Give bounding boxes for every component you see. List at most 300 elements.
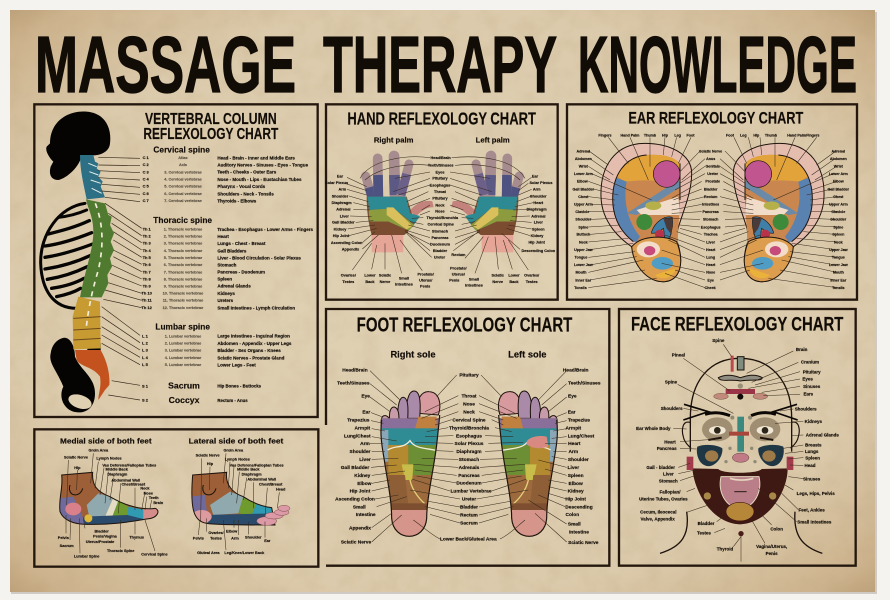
section: thoracic spine: Adrenal Glands bbox=[217, 284, 251, 289]
labels: Head/Brain bbox=[431, 156, 451, 160]
labels: Solar Plexus bbox=[530, 181, 552, 185]
labels: Bladder bbox=[704, 187, 718, 191]
labels: Chest bbox=[833, 195, 844, 199]
labels: Heart bbox=[706, 263, 716, 267]
section: lumbar spine: Lower Legs - Feet bbox=[217, 362, 256, 367]
labels: Kidneys bbox=[805, 419, 823, 424]
labels: Abdominal Wall bbox=[111, 478, 140, 482]
section: cervical spine: 3. Cervical vertebrae bbox=[164, 170, 202, 174]
illustration: right sole bbox=[378, 391, 442, 545]
labels: Sciatic Nerve bbox=[64, 456, 88, 460]
labels: Prostate/ bbox=[450, 267, 467, 271]
section: thoracic spine: Ureters bbox=[217, 298, 234, 303]
labels: Ascending Colon bbox=[331, 241, 363, 245]
labels: Spleen bbox=[832, 233, 844, 237]
labels: Chest/Breast bbox=[122, 483, 146, 487]
labels: Shoulder bbox=[332, 194, 349, 198]
section: thoracic spine: Th 2 bbox=[143, 234, 152, 239]
labels: Penis bbox=[766, 551, 778, 556]
labels: Throat bbox=[461, 393, 477, 399]
section: sacrum and coccyx: S 2 bbox=[142, 397, 149, 402]
labels: Pituitary bbox=[432, 177, 449, 181]
title: THERAPY bbox=[323, 20, 557, 109]
section: thoracic spine: 4. Thoracic vertebrae bbox=[164, 249, 202, 253]
labels: Spine bbox=[578, 225, 588, 229]
labels: Descending bbox=[565, 504, 593, 510]
labels: Rectum bbox=[460, 513, 478, 519]
labels: Lower Jaw bbox=[574, 263, 593, 267]
section: thoracic spine: Spleen bbox=[217, 277, 232, 282]
labels: Abdomen bbox=[830, 157, 847, 161]
labels: Hip Joint bbox=[528, 241, 546, 245]
labels: Legs, Hips, Pelvis bbox=[797, 491, 835, 496]
labels: Intestines bbox=[465, 283, 483, 287]
labels: Penis/Vagina bbox=[93, 534, 118, 538]
illustration: left palm bbox=[451, 156, 519, 252]
labels: Heart bbox=[664, 439, 676, 444]
section: cervical spine: Teeth - Cheeks - Outer Ears bbox=[217, 170, 277, 175]
labels: Throat bbox=[434, 190, 447, 194]
labels: Gall Bladder bbox=[573, 187, 595, 191]
section: cervical spine: 4. Cervical vertebrae bbox=[164, 177, 202, 181]
labels: Trapezius bbox=[568, 417, 590, 423]
labels: Pituitary bbox=[459, 373, 479, 379]
labels: Shoulder bbox=[830, 218, 847, 222]
labels: Liver bbox=[340, 214, 349, 218]
labels: Spine bbox=[665, 379, 678, 384]
labels: Appendix bbox=[342, 247, 360, 251]
labels: Esophagus bbox=[456, 433, 482, 439]
labels: Kidney bbox=[531, 234, 544, 238]
labels: Ureter bbox=[707, 172, 719, 176]
labels: Teeth/Sinuses bbox=[568, 380, 601, 386]
labels: Thoracic Spine bbox=[107, 549, 134, 553]
labels: Armpit bbox=[566, 425, 581, 431]
section: cervical spine: Pharynx - Vocal Cords bbox=[217, 184, 266, 189]
labels: Bladder bbox=[433, 249, 448, 253]
section: thoracic spine: Heart bbox=[217, 234, 229, 239]
labels: Colon bbox=[565, 512, 579, 518]
labels: Duodenum bbox=[456, 481, 482, 487]
illustration: right ear bbox=[733, 143, 824, 282]
labels: Sciatic Nerve bbox=[196, 454, 220, 458]
labels: Sinuses bbox=[803, 384, 821, 389]
section: lumbar spine bbox=[142, 322, 292, 367]
labels: Uterus/ bbox=[419, 278, 433, 282]
section: thoracic spine: Gall Bladders bbox=[217, 248, 247, 253]
labels: Ear bbox=[532, 174, 539, 178]
labels: Pancreas bbox=[431, 236, 449, 240]
section: cervical spine: Auditory Nerves - Sinuses - Eyes - Tongue bbox=[217, 163, 309, 168]
illustration: right palm bbox=[366, 156, 434, 252]
labels: Tonsils bbox=[574, 286, 587, 290]
subheading: medial side: Medial side of both feet bbox=[60, 437, 152, 446]
heading: vertebral column: REFLEXOLOGY CHART bbox=[143, 126, 279, 143]
labels: Upper Jaw bbox=[829, 248, 848, 252]
labels: Cheek bbox=[705, 286, 717, 290]
labels: Sacrum bbox=[460, 521, 478, 527]
heading: foot chart: FOOT REFLEXOLOGY CHART bbox=[357, 314, 573, 337]
section: thoracic spine: Th 11 bbox=[142, 298, 153, 303]
labels: Uterus/Prostate bbox=[86, 540, 114, 544]
labels: Gall - bladder bbox=[646, 465, 675, 470]
labels: Groin Area bbox=[89, 448, 109, 452]
labels: Prostate/ bbox=[417, 272, 435, 276]
panel: hand reflexology chart bbox=[325, 104, 558, 300]
section: thoracic spine: 8. Thoracic vertebrae bbox=[164, 277, 202, 281]
labels: Groin Area bbox=[224, 448, 244, 452]
section: thoracic spine: Th 10 bbox=[141, 291, 153, 296]
labels: Neck bbox=[463, 409, 475, 415]
labels: Lower Arm bbox=[829, 172, 849, 176]
labels: Testes bbox=[342, 280, 354, 284]
labels: Abdomen bbox=[575, 157, 592, 161]
section: lumbar spine: L 5 bbox=[142, 362, 149, 367]
labels: Prostate bbox=[705, 180, 720, 184]
labels: Leg/Knee/Lower Back bbox=[224, 551, 265, 555]
labels: Heart bbox=[568, 441, 581, 447]
labels: Clavicle bbox=[831, 210, 845, 214]
labels: Spine bbox=[833, 225, 843, 229]
section: sacrum and coccyx: Rectum - Anus bbox=[217, 398, 248, 403]
labels: Shoulder bbox=[575, 218, 592, 222]
labels: Uterine Tubes, Ovaries bbox=[639, 497, 688, 502]
labels: Hand Palm bbox=[621, 134, 640, 138]
labels: Duodenum bbox=[430, 243, 451, 247]
section: lumbar spine: 1. Lumbar vertebrae bbox=[165, 334, 201, 338]
section: thoracic spine: 6. Thoracic vertebrae bbox=[164, 263, 202, 267]
section: lumbar spine: 2. Lumbar vertebrae bbox=[165, 342, 201, 346]
labels: Neck bbox=[140, 487, 150, 491]
section: thoracic spine: Th 4 bbox=[143, 248, 152, 253]
labels: Small Intestines bbox=[797, 520, 832, 525]
labels: Diaphragm bbox=[527, 208, 547, 212]
labels: Intestines bbox=[395, 282, 413, 286]
labels: Chest/Breast bbox=[259, 483, 283, 487]
labels: Nose bbox=[435, 209, 445, 213]
section: lumbar spine: L 2 bbox=[142, 341, 149, 346]
illustration: left sole bbox=[497, 391, 560, 545]
labels: Shoulders bbox=[795, 407, 817, 412]
subheading: left palm: Left palm bbox=[476, 135, 510, 144]
labels: Kidney bbox=[334, 227, 347, 231]
labels: Pancreas bbox=[703, 210, 719, 214]
labels: Elbow bbox=[577, 180, 588, 184]
labels: Descending Colon bbox=[522, 249, 556, 253]
labels: Anus bbox=[706, 157, 715, 161]
labels: Teeth/Sinuses bbox=[428, 164, 454, 168]
labels: Arm bbox=[360, 441, 370, 447]
labels: Neck bbox=[435, 203, 445, 207]
section: sacrum and coccyx: Hip Bones - Buttocks bbox=[217, 384, 262, 389]
section: thoracic spine: 7. Thoracic vertebrae bbox=[164, 270, 202, 274]
labels: Kidney bbox=[354, 473, 371, 479]
labels: Testes bbox=[697, 530, 711, 535]
labels: Fingers bbox=[598, 134, 612, 138]
labels: Eyes bbox=[436, 170, 444, 174]
labels: Leg bbox=[740, 134, 747, 138]
labels: Bladder bbox=[95, 529, 109, 533]
labels: Tongue bbox=[832, 256, 845, 260]
illustration: skeleton spine bbox=[41, 111, 114, 412]
illustration: medial foot bbox=[59, 472, 158, 525]
labels: Mouth bbox=[833, 271, 844, 275]
section: thoracic spine: Stomach bbox=[217, 262, 237, 267]
panel: ear reflexology chart bbox=[567, 104, 857, 300]
labels: Adrenals bbox=[459, 465, 480, 471]
labels: Intestine bbox=[569, 529, 589, 535]
section: lumbar spine: L 4 bbox=[142, 355, 149, 360]
labels: Spine bbox=[712, 338, 725, 343]
panel: foot reflexology chart bbox=[326, 309, 609, 566]
labels: Trachea bbox=[704, 233, 719, 237]
illustration: lateral foot bbox=[188, 470, 290, 527]
labels: Fallopian/ bbox=[660, 489, 681, 494]
labels: Spleen bbox=[532, 227, 545, 231]
labels: Lung bbox=[706, 256, 715, 260]
labels: Sciatic Nerve bbox=[341, 540, 371, 546]
labels: Neck bbox=[579, 240, 589, 244]
labels: Elbow bbox=[569, 481, 583, 487]
labels: Breasts bbox=[805, 443, 822, 448]
section: sacrum and coccyx: Coccyx bbox=[169, 395, 200, 405]
labels: Pituitary bbox=[803, 369, 821, 374]
labels: Colon bbox=[770, 527, 783, 532]
labels: Spleen bbox=[568, 473, 584, 479]
labels: Brain bbox=[153, 501, 164, 505]
section: lumbar spine: 5. Lumbar vertebrae bbox=[165, 363, 201, 367]
labels: Testes bbox=[526, 280, 538, 284]
labels: Spleen bbox=[805, 455, 820, 460]
section: thoracic spine: Th 3 bbox=[143, 241, 152, 246]
labels: Stomach bbox=[659, 478, 678, 483]
labels: Thyroid/Bronchia bbox=[426, 216, 459, 220]
section: lumbar spine: Sciatic Nerves - Prostate Gland bbox=[217, 355, 285, 360]
labels: Inner Ear bbox=[830, 278, 847, 282]
section: thoracic spine: Kidneys bbox=[217, 291, 235, 296]
labels: Appendix bbox=[349, 525, 371, 531]
labels: Ovaries/ bbox=[524, 273, 540, 277]
leader lines bbox=[588, 137, 837, 288]
labels: Hip bbox=[74, 466, 81, 470]
section: thoracic spine: 1. Thoracic vertebrae bbox=[164, 227, 202, 231]
section: cervical spine: Axis bbox=[179, 163, 187, 167]
labels: Diaphragm bbox=[107, 473, 128, 477]
labels: Feet, Ankles bbox=[799, 507, 825, 512]
labels: Buttock bbox=[577, 233, 591, 237]
labels: Thyroid bbox=[717, 547, 733, 552]
section: thoracic spine: Th 12 bbox=[141, 305, 153, 310]
labels: Teeth/Sinuses bbox=[337, 380, 370, 386]
labels: Uterus/ bbox=[452, 272, 466, 276]
labels: Stomach bbox=[459, 457, 479, 463]
section: cervical spine: Cervical spine bbox=[153, 144, 210, 154]
labels: Arm bbox=[568, 449, 578, 455]
section: thoracic spine bbox=[141, 215, 314, 310]
labels: Armpit bbox=[355, 425, 371, 431]
heading: vertebral column: VERTEBRAL COLUMN bbox=[145, 111, 277, 128]
section: sacrum and coccyx: Sacrum bbox=[168, 380, 200, 390]
section: lumbar spine: L 3 bbox=[142, 348, 149, 353]
labels: Cervical Spine bbox=[452, 417, 486, 423]
labels: Rectum bbox=[451, 253, 466, 257]
labels: Shoulders bbox=[661, 406, 683, 411]
labels: Cervical Spine bbox=[427, 223, 454, 227]
section: thoracic spine: Trachea - Esophagus - Lower Arms - Fingers bbox=[217, 227, 314, 232]
section: lumbar spine: Lumbar spine bbox=[155, 322, 210, 332]
section: cervical spine: Nose - Mouth - Lips - Eustachian Tubes bbox=[217, 177, 302, 182]
section: lumbar spine: L 1 bbox=[142, 333, 149, 338]
labels: Esophagus bbox=[701, 225, 721, 229]
section: cervical spine bbox=[143, 144, 309, 203]
labels: Tonsils bbox=[832, 286, 845, 290]
labels: Eyes bbox=[802, 377, 813, 382]
labels: Gluteal Area bbox=[197, 551, 220, 555]
section: lumbar spine: Abdomen - Appendix - Upper Legs bbox=[217, 341, 292, 346]
labels: Lower Arm bbox=[574, 172, 594, 176]
labels: Nose bbox=[144, 492, 153, 496]
labels: Thyroid/Bronchia bbox=[449, 425, 489, 431]
labels: Arm bbox=[533, 188, 541, 192]
labels: Vas Deferens/Fallopian Tubes bbox=[102, 463, 156, 467]
labels: Sciatic Nerve bbox=[568, 540, 599, 546]
labels: Heart bbox=[706, 248, 716, 252]
labels: Trapezius bbox=[347, 417, 370, 423]
labels: Adrenal bbox=[832, 149, 845, 153]
labels: Sciatic Nerve bbox=[699, 149, 722, 153]
labels: Upper Jaw bbox=[574, 248, 593, 252]
labels: Nerve bbox=[492, 280, 503, 284]
section: lumbar spine: 3. Lumbar vertebrae bbox=[165, 349, 201, 353]
section: thoracic spine: Liver - Blood Circulation - Solar Plexus bbox=[217, 255, 301, 260]
section: thoracic spine: Th 1 bbox=[143, 226, 152, 231]
labels: Genitals bbox=[705, 165, 720, 169]
labels: Small bbox=[353, 504, 366, 510]
section: thoracic spine: 12. Thoracic vertebrae bbox=[163, 306, 203, 310]
section: thoracic spine: Th 9 bbox=[143, 283, 152, 288]
labels: Back bbox=[365, 280, 375, 284]
labels: Valve, Appendix bbox=[641, 517, 675, 522]
labels: Upper Arm bbox=[574, 203, 593, 207]
labels: Lower bbox=[508, 273, 520, 277]
section: cervical spine: 5. Cervical vertebrae bbox=[164, 185, 202, 189]
section: thoracic spine: Small Intestines - Lymph Circulation bbox=[217, 305, 295, 310]
section: cervical spine: C 6 bbox=[143, 191, 150, 196]
labels: Eye bbox=[361, 394, 370, 400]
labels: Middle Back bbox=[237, 467, 260, 471]
labels: Pelvis bbox=[193, 537, 204, 541]
labels: Diaphragm bbox=[332, 201, 352, 205]
labels: Chest bbox=[578, 195, 589, 199]
labels: Ear bbox=[337, 174, 344, 178]
labels: Nerve bbox=[380, 280, 390, 284]
labels: Pancreas bbox=[657, 446, 677, 451]
section: cervical spine: C 1 bbox=[143, 155, 150, 160]
labels: Shoulder bbox=[350, 449, 371, 455]
labels: Arm bbox=[338, 188, 347, 192]
labels: Ears bbox=[803, 391, 814, 396]
labels: Arm bbox=[231, 537, 239, 541]
subheading: right palm: Right palm bbox=[374, 135, 414, 144]
labels: Cecum, Ileocecal bbox=[640, 509, 677, 514]
labels: Ureter bbox=[434, 256, 446, 260]
labels: Cranium bbox=[801, 359, 819, 364]
section: thoracic spine: Th 6 bbox=[143, 262, 152, 267]
labels: Liver bbox=[706, 240, 716, 244]
illustration: left ear bbox=[601, 143, 692, 282]
labels: Adrenal bbox=[336, 208, 350, 212]
labels: Solar Plexus bbox=[325, 181, 348, 185]
labels: Hip bbox=[207, 462, 214, 466]
labels: Diaphragm bbox=[456, 449, 482, 455]
labels: Intestine bbox=[356, 512, 376, 518]
panel: face reflexology chart bbox=[619, 309, 856, 566]
panel: medial and lateral feet bbox=[34, 429, 318, 567]
labels: Small bbox=[399, 277, 409, 281]
section: thoracic spine: Pancreas - Duodenum bbox=[217, 270, 265, 275]
subheading: lateral side: Lateral side of both feet bbox=[189, 437, 284, 446]
labels: Liver bbox=[568, 465, 579, 471]
labels: Pelvis bbox=[58, 536, 69, 540]
section: lumbar spine: Bladder - Sex Organs - Knees bbox=[217, 348, 281, 353]
section: cervical spine: C 3 bbox=[143, 169, 150, 174]
labels: Pineal bbox=[672, 353, 685, 358]
labels: Shoulder bbox=[568, 457, 589, 463]
subheading: left sole: Left sole bbox=[508, 349, 547, 359]
labels: Adrenal bbox=[531, 214, 545, 218]
labels: Diaphragm bbox=[242, 473, 262, 477]
labels: Ear Whole Body bbox=[636, 426, 671, 431]
labels: Lower Jaw bbox=[829, 263, 848, 267]
leader lines bbox=[673, 344, 803, 547]
labels: Abdominal Wall bbox=[247, 478, 276, 482]
labels: Kidney bbox=[568, 489, 584, 495]
labels: Esophagus bbox=[430, 183, 450, 187]
section: cervical spine: 7. Cervical vertebrae bbox=[164, 199, 202, 203]
labels: Intestines bbox=[702, 203, 719, 207]
labels: Penis bbox=[449, 278, 459, 282]
labels: Leg bbox=[674, 134, 681, 138]
labels: Gall Bladder bbox=[341, 465, 369, 471]
labels: Fingers bbox=[806, 134, 819, 138]
section: thoracic spine: 11. Thoracic vertebrae bbox=[163, 299, 203, 303]
title bbox=[35, 20, 857, 109]
labels: Hip Joint bbox=[565, 497, 586, 503]
leader lines bbox=[370, 371, 567, 542]
section: thoracic spine: 3. Thoracic vertebrae bbox=[164, 242, 202, 246]
section: thoracic spine: Th 5 bbox=[143, 255, 152, 260]
labels: Shoulder bbox=[530, 194, 547, 198]
leader lines bbox=[345, 157, 533, 273]
section: thoracic spine: 10. Thoracic vertebrae bbox=[163, 292, 203, 296]
illustration: face map bbox=[660, 356, 822, 562]
labels: Hip bbox=[662, 134, 669, 138]
labels: Inner Ear bbox=[575, 278, 592, 282]
panel: vertebral column reflexology chart bbox=[34, 104, 318, 417]
labels: Nose bbox=[463, 401, 475, 407]
labels: Gall Bladder bbox=[332, 221, 355, 225]
labels: Head/Brain bbox=[563, 367, 588, 373]
section: thoracic spine: Thoracic spine bbox=[153, 215, 212, 225]
labels: Stomach bbox=[703, 218, 718, 222]
labels: Vas Deferens/Fallopian Tubes bbox=[230, 463, 284, 467]
labels: Mouth bbox=[576, 271, 586, 275]
section: thoracic spine: Lungs - Chest - Breast bbox=[217, 241, 266, 246]
section: thoracic spine: Th 8 bbox=[143, 276, 152, 281]
labels: Nose bbox=[706, 271, 715, 275]
section: cervical spine: C 2 bbox=[143, 162, 150, 167]
labels: Eye bbox=[707, 278, 714, 282]
